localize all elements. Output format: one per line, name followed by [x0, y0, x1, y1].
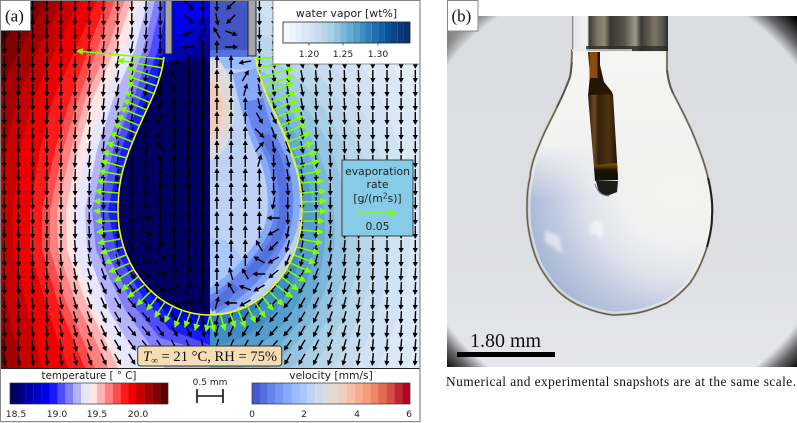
temperature colorbar: temperature [ ° C] [42, 370, 136, 382]
legend: water vapor colorbar: 1.25 [333, 49, 353, 60]
legend: water vapor colorbar: 1.30 [368, 49, 388, 60]
legend: water vapor colorbar [273, 0, 420, 64]
droplet interior: temperature on left, velocity on right [118, 1, 302, 314]
temperature colorbar: 19.5 [87, 409, 107, 420]
caption: Numerical and experimental snapshots are at the same scale. [446, 374, 796, 389]
legend: evaporation rate: 2 [383, 192, 388, 200]
evaporation rate arrows, right [210, 51, 343, 331]
panel (b): experimental photograph [447, 0, 797, 367]
water vapor field, right exterior [210, 0, 420, 368]
label (b): (b) [452, 6, 471, 26]
hanging water droplet [527, 50, 712, 315]
label (b) [448, 0, 478, 31]
velocity arrows, right half [211, 0, 418, 366]
needle, right wall [248, 0, 256, 56]
velocity colorbar: 0 [249, 409, 255, 420]
legend: water vapor colorbar: 1.20 [299, 49, 319, 60]
needle, left wall [165, 0, 172, 54]
legend strip [0, 368, 420, 422]
velocity colorbar: 4 [354, 409, 360, 420]
conditions label: T [143, 349, 152, 365]
panel frame [0, 0, 420, 422]
legend: evaporation rate [342, 160, 413, 236]
legend: evaporation rate: [g/(m [353, 192, 383, 205]
velocity colorbar: velocity [mm/s] [289, 369, 373, 382]
legend: evaporation rate: evaporation [345, 165, 410, 178]
velocity colorbar [249, 369, 412, 420]
conditions label: = 21 °C, RH = 75% [158, 349, 277, 365]
scale bar 1.80 mm: 1.80 mm [470, 330, 542, 352]
scale bar 0.5 mm: 0.5 mm [193, 378, 227, 388]
legend: evaporation rate: rate [367, 178, 389, 191]
velocity arrows, left half [1, 0, 208, 366]
temperature colorbar: 19.0 [47, 409, 67, 420]
scale bar 1.80 mm [457, 330, 555, 357]
scale bar 0.5 mm [193, 378, 227, 403]
legend: evaporation rate: s)] [388, 192, 402, 205]
temperature colorbar [6, 370, 168, 420]
temperature colorbar: 18.5 [6, 409, 26, 420]
metal collar [572, 15, 668, 52]
label (a): (a) [5, 6, 24, 26]
temperature field, left half [0, 0, 210, 368]
conditions label [138, 346, 282, 366]
temperature colorbar: 20.0 [128, 409, 148, 420]
evaporation rate arrows, left [77, 51, 210, 331]
sensor wire and tube [588, 52, 618, 196]
panel (a): numerical simulation [0, 0, 420, 422]
droplet outline [118, 57, 302, 315]
velocity colorbar: 2 [301, 409, 307, 420]
velocity colorbar: 6 [406, 409, 412, 420]
legend: evaporation rate: 0.05 [365, 220, 390, 233]
conditions label: ∞ [151, 356, 158, 366]
photo background with vignette [447, 16, 797, 367]
legend: water vapor colorbar: water vapor [wt%] [296, 7, 397, 20]
label (a) [0, 0, 30, 30]
